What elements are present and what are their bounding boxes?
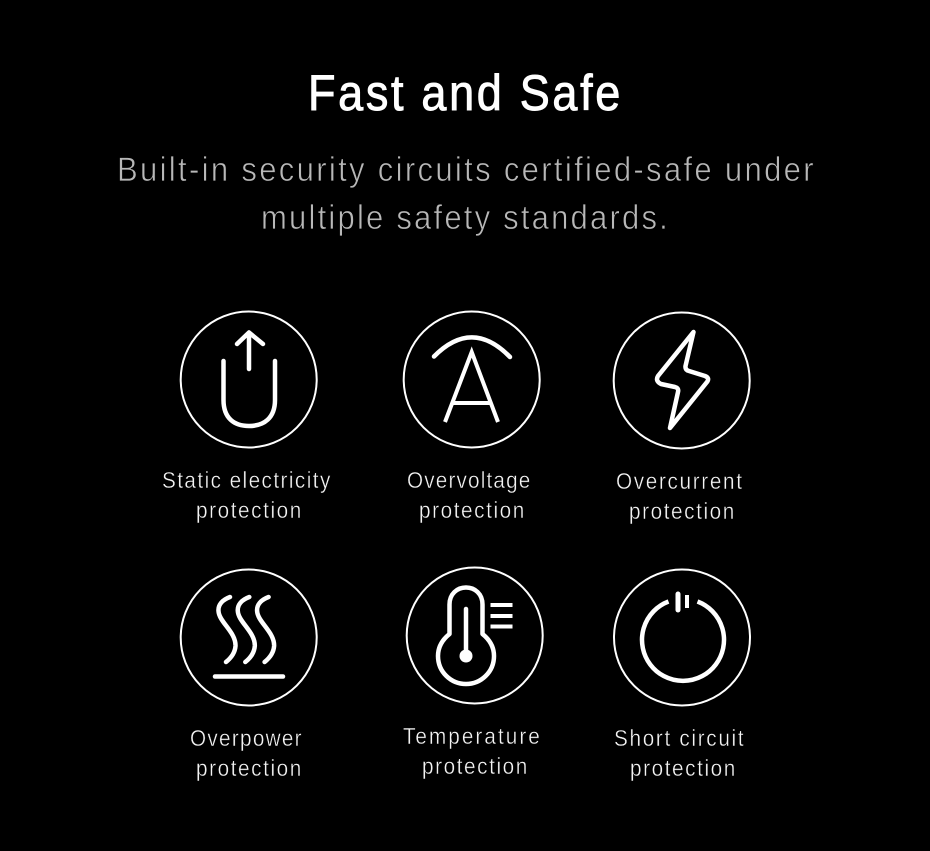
subtitle (117, 149, 814, 236)
label: short circuit (614, 725, 744, 781)
label: static electricity: protection (196, 497, 301, 523)
label: overvoltage: protection (419, 497, 524, 523)
label: short circuit: protection (630, 755, 735, 781)
icon: power symbol (614, 570, 750, 706)
subtitle: Built-in security circuits certified-safe under (117, 149, 814, 188)
label: overcurrent: Overcurrent (616, 468, 742, 494)
label: static electricity (162, 467, 330, 523)
icon: thermometer (407, 568, 543, 704)
item: overvoltage protection (404, 312, 540, 523)
label: overvoltage: Overvoltage (407, 467, 530, 493)
label: temperature: protection (422, 753, 527, 779)
label: overcurrent (616, 468, 742, 524)
label: overpower: protection (196, 755, 301, 781)
icon: lightning bolt (614, 312, 750, 448)
title: Fast and Safe (308, 66, 620, 122)
item: overpower protection (181, 570, 317, 781)
icon: heat waves over a line (181, 570, 317, 706)
item: static electricity protection (162, 312, 330, 523)
label: static electricity: Static electricity (162, 467, 330, 493)
label: temperature (403, 723, 540, 779)
label: temperature: Temperature (403, 723, 540, 749)
icon: letter A under arc (404, 312, 540, 448)
label: overvoltage (407, 467, 530, 523)
label: overpower (190, 725, 302, 781)
icon: upward arrow into U (181, 312, 317, 448)
item: overcurrent protection (614, 312, 750, 524)
label: short circuit: Short circuit (614, 725, 744, 751)
item: temperature protection (403, 568, 543, 779)
label: overpower: Overpower (190, 725, 302, 751)
label: overcurrent: protection (629, 498, 734, 524)
subtitle: multiple safety standards. (261, 197, 668, 236)
item: short circuit protection (614, 570, 750, 781)
